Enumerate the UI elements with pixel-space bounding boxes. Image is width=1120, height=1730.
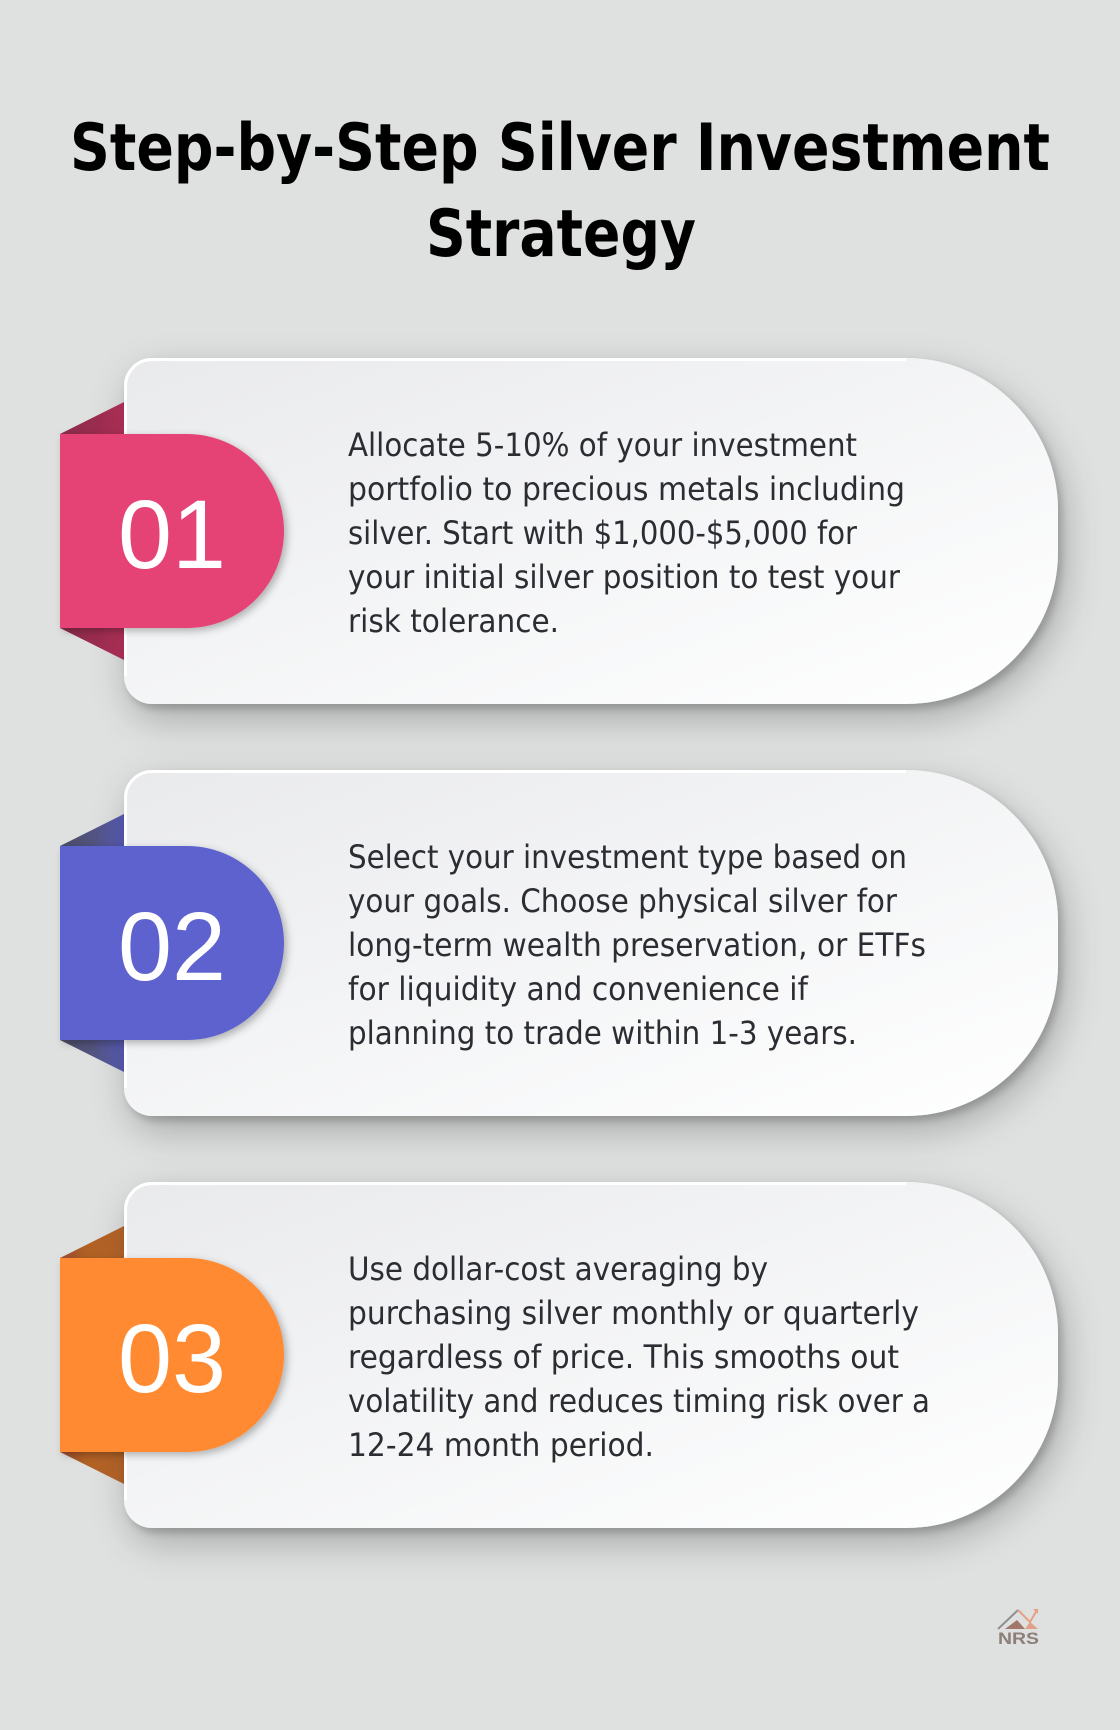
card: step 3 [124,1182,1058,1528]
text: step 3 description: volatility and reduces timing risk over a [348,1382,930,1420]
text: step 1 description: your initial silver position to test your [348,558,901,596]
text: step 2 description: long-term wealth preservation, or ETFs [348,926,926,964]
text: step 3 description: 12-24 month period. [348,1426,654,1464]
title: Strategy [426,197,696,272]
badge: step 2 [60,846,284,1040]
text: step 3 description [348,1250,930,1464]
text: step 1 description: Allocate 5-10% of your investment [348,426,857,464]
text: step 1 description: portfolio to precious metals including [348,470,905,508]
badge: step 3 [60,1258,284,1452]
text: step 2 description: your goals. Choose physical silver for [348,882,898,920]
number 01: 01 [118,480,226,589]
text: step 3 description: regardless of price. This smooths out [348,1338,899,1376]
logo: NRS: NRS [998,1629,1039,1648]
title [70,111,1050,272]
fold: step 2 ribbon bottom [60,1040,124,1072]
fold: step 3 ribbon bottom [60,1452,124,1484]
text: step 2 description: planning to trade within 1-3 years. [348,1014,857,1052]
panel: step 2 [60,770,1058,1116]
text: step 2 description [348,838,926,1052]
panel: step 1 [60,358,1058,704]
text: step 1 description [348,426,905,640]
number 02: 02 [118,892,226,1001]
fold: step 1 ribbon bottom [60,628,124,660]
fold: step 2 ribbon top [60,814,124,846]
fold: step 1 ribbon top [60,402,124,434]
text: step 1 description: risk tolerance. [348,602,559,640]
text: step 3 description: purchasing silver monthly or quarterly [348,1294,919,1332]
fold: step 3 ribbon top [60,1226,124,1258]
number 03: 03 [118,1304,226,1413]
badge: step 1 [60,434,284,628]
text: step 2 description: Select your investment type based on [348,838,907,876]
logo: NRS [998,1609,1039,1648]
text: step 2 description: for liquidity and convenience if [348,970,809,1008]
panel: step 3 [60,1182,1058,1528]
text: step 1 description: silver. Start with $1,000-$5,000 for [348,514,858,552]
card: step 1 [124,358,1058,704]
card: step 2 [124,770,1058,1116]
text: step 3 description: Use dollar-cost averaging by [348,1250,768,1288]
